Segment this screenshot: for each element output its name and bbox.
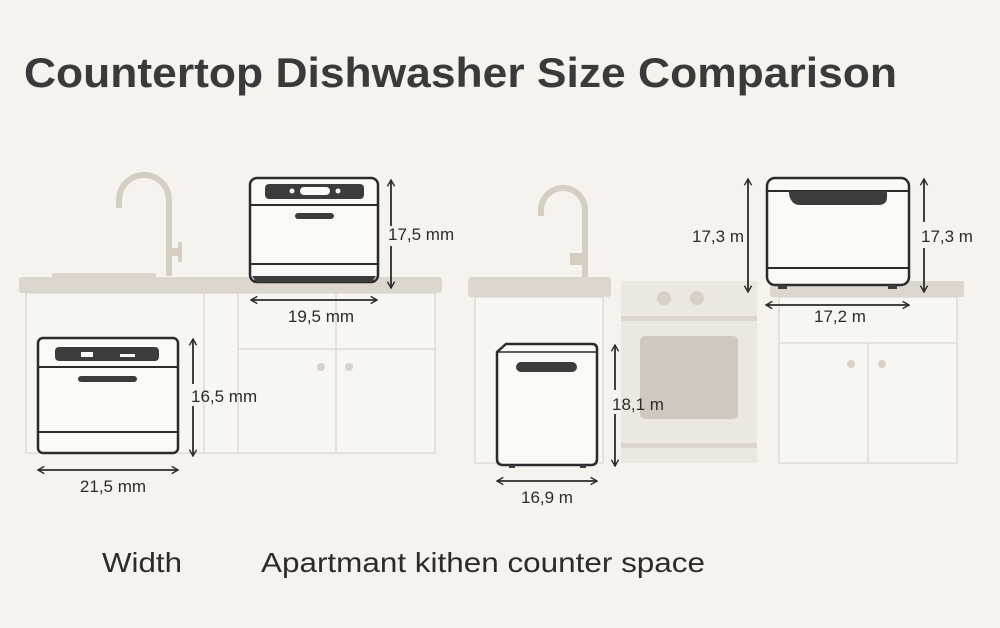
right counter cabinet	[770, 281, 964, 463]
dimension: 18,1 m: 18,1 m	[612, 395, 664, 414]
dimension: 17,3 m right: 17,3 m	[921, 227, 973, 246]
left kitchen counter	[19, 273, 442, 453]
dimension: 17,3 m left	[692, 179, 748, 292]
dimension: 16,9 m	[497, 481, 597, 507]
icon: left faucet	[119, 175, 182, 276]
dimension: 21,5 mm: 21,5 mm	[80, 477, 146, 496]
dishwasher 1 (on counter)	[250, 178, 378, 282]
dimension: 21,5 mm	[38, 470, 178, 496]
dishwasher 3 (under sink)	[497, 344, 597, 468]
dimension: 17,3 m right	[921, 179, 973, 292]
dimension: 19,5 mm: 19,5 mm	[288, 307, 354, 326]
label: Width: Width	[102, 547, 182, 578]
dimension: 17,5 mm	[388, 180, 454, 288]
dimension: 17,2 m: 17,2 m	[814, 307, 866, 326]
dimension: 19,5 mm	[251, 300, 377, 326]
dimension: 18,1 m	[612, 345, 664, 466]
dimension: 17,3 m left: 17,3 m	[692, 227, 744, 246]
icon: right faucet	[541, 188, 586, 277]
dimension: 16,9 m: 16,9 m	[521, 488, 573, 507]
dishwasher 4 (on right counter)	[767, 178, 909, 289]
oven	[621, 281, 757, 463]
dimension: 16,5 mm	[191, 339, 257, 456]
title: Countertop Dishwasher Size Comparison	[24, 49, 897, 96]
label: Apartment counter space: Apartmant kithen counter space	[261, 547, 705, 578]
dishwasher 2 (under counter)	[38, 338, 178, 453]
sink counter right	[468, 277, 611, 463]
dimension: 17,5 mm: 17,5 mm	[388, 225, 454, 244]
dimension: 16,5 mm: 16,5 mm	[191, 387, 257, 406]
